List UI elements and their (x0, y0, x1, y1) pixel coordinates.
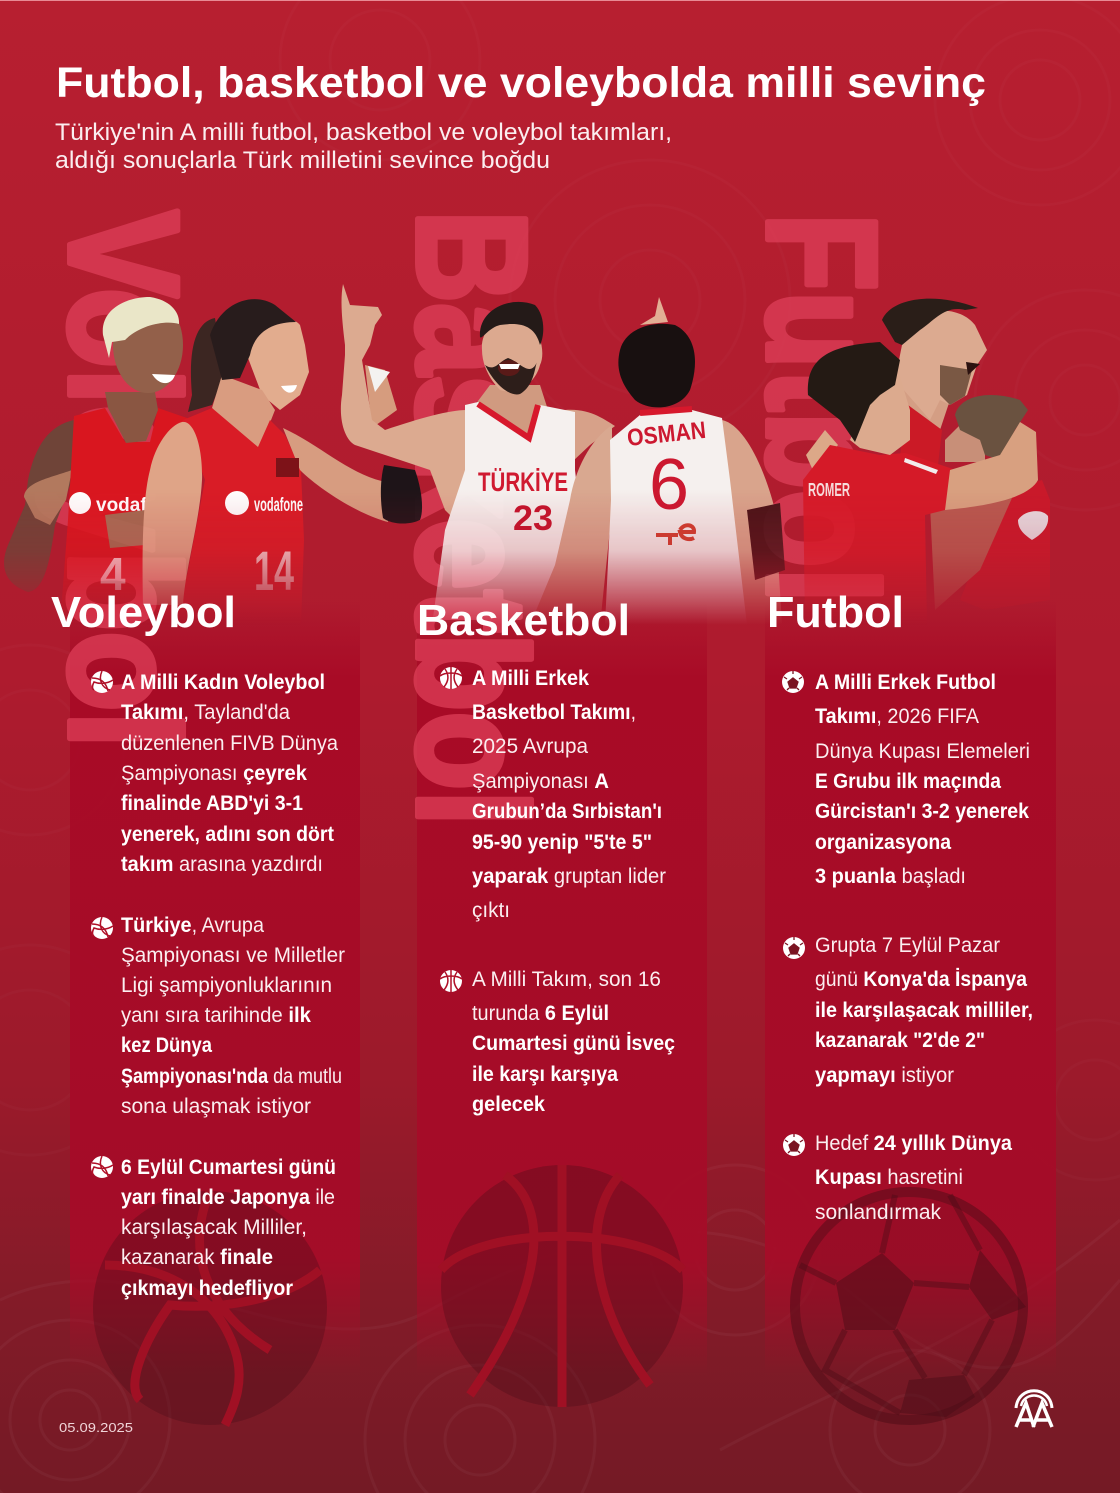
text block: futbol bullet 3 (815, 1132, 1012, 1224)
player 23 neck (477, 385, 547, 434)
text block: voleybol bullet 1: düzenlenen FIVB Dünya (121, 732, 338, 755)
text block: voleybol bullet 3: kazanarak finale (121, 1246, 273, 1269)
text block: voleybol bullet 1: takım arasına yazdırdı (121, 853, 323, 876)
text block: basketbol bullet 2: gelecek (472, 1093, 545, 1116)
text block: basketbol bullet 2: turunda 6 Eylül (472, 1002, 609, 1025)
heading: Voleybol: Voleybol (51, 588, 236, 637)
player two number: 14 (254, 539, 294, 602)
player two ponytail (188, 318, 224, 412)
text block: futbol bullet 2 (815, 934, 1033, 1087)
back player hair (882, 299, 978, 345)
text block: basketbol bullet 1: 2025 Avrupa (472, 735, 588, 758)
icon: volleyball bullet 1 (91, 671, 113, 693)
player 6 number: 6 (649, 445, 689, 525)
player two hair (210, 299, 296, 380)
subtitle (55, 119, 672, 174)
player one sponsor: vodaf (96, 495, 147, 516)
watermark: Futbol vertical word: Futbol (734, 213, 908, 603)
subtitle: aldığı sonuçlarla Türk milletini sevince boğdu (55, 147, 550, 174)
photo: football players (803, 299, 1050, 625)
player 6 sponsor logo (656, 525, 694, 545)
text block: basketbol bullet 2: Cumartesi günü İsveç (472, 1032, 675, 1055)
back player jersey (900, 405, 942, 465)
text block: futbol bullet 3: Kupası hasretini (815, 1166, 963, 1189)
player 23 right shoulder (565, 410, 615, 462)
text block: futbol bullet 1: A Milli Erkek Futbol (815, 671, 996, 694)
text block: basketbol bullet 1: Şampiyonası A (472, 770, 609, 793)
text block: voleybol bullet 2: Şampiyonası ve Milletler (121, 944, 345, 967)
text block: voleybol bullet 2 (121, 914, 345, 1118)
subtitle: Türkiye'nin A milli futbol, basketbol ve voleybol takımları, (55, 119, 672, 146)
text block: futbol bullet 1: Takımı, 2026 FIFA (815, 705, 979, 728)
player two logo (225, 491, 249, 515)
player one hand (24, 470, 72, 525)
title: Futbol, basketbol ve voleybolda milli sevinç (56, 59, 986, 107)
icon: soccer bullet 2 (783, 937, 805, 959)
heading: Futbol: Futbol (767, 588, 904, 637)
heading: Basketbol: Basketbol (417, 596, 630, 645)
text block: voleybol bullet 1 (121, 671, 338, 876)
text block: voleybol bullet 3: karşılaşacak Milliler, (121, 1216, 307, 1239)
third player face (945, 425, 985, 462)
player 23 mouth (498, 360, 520, 376)
text block: voleybol bullet 2: sona ulaşmak istiyor (121, 1095, 311, 1118)
player 6 finger (640, 297, 668, 325)
icon: basketball silhouette (441, 1165, 683, 1407)
front player jersey name: ROMER (808, 480, 850, 500)
text block: futbol bullet 1: 3 puanla başladı (815, 865, 966, 888)
player two jersey (187, 408, 304, 607)
front player neck and face (850, 370, 910, 455)
date: 05.09.2025 (59, 1420, 133, 1435)
player 23 teeth (499, 364, 520, 369)
text block: basketbol bullet 1: Grubun’da Sırbistan'ı (472, 800, 662, 823)
back player face (895, 311, 987, 420)
front player hair (808, 342, 900, 442)
text block: futbol bullet 1: E Grubu ilk maçında (815, 770, 1001, 793)
front player arm (945, 422, 1038, 510)
patch (1018, 511, 1048, 540)
text block: voleybol bullet 3: yarı finalde Japonya ile (121, 1186, 335, 1209)
player two neck (212, 375, 275, 448)
text block: voleybol bullet 3 (121, 1156, 336, 1300)
icon: soccer bullet 3 (783, 1134, 805, 1156)
text block: basketbol bullet 1: yaparak gruptan lider (472, 865, 666, 888)
player 23 hair (480, 302, 543, 345)
text block: futbol bullet 3: sonlandırmak (815, 1201, 941, 1224)
player 23 number: 23 (513, 499, 553, 538)
player 6 left arm (530, 425, 612, 625)
player two right arm (283, 428, 388, 522)
text block: basketbol bullet 2 (472, 968, 675, 1116)
right player body (960, 480, 1050, 610)
third player hair (955, 395, 1028, 460)
text block: futbol bullet 1: Gürcistan'ı 3-2 yenerek (815, 800, 1029, 823)
player one logo (69, 492, 91, 514)
text block: futbol bullet 2: Grupta 7 Eylül Pazar (815, 934, 1000, 957)
back player neck (895, 370, 950, 430)
text block: voleybol bullet 1: Şampiyonası çeyrek (121, 762, 307, 785)
icon: volleyball bullet 2 (91, 917, 113, 939)
text block: futbol bullet 2: günü Konya'da İspanya (815, 968, 1027, 991)
text block: voleybol bullet 2: Türkiye, Avrupa (121, 914, 264, 937)
player two face (245, 319, 309, 410)
text block: voleybol bullet 1: finalinde ABD'yi 3-1 (121, 792, 303, 815)
player 6 armband (747, 503, 785, 580)
player 23 tape (368, 366, 390, 392)
panel: futbol column (765, 600, 1056, 1375)
icon: soccer ball silhouette (790, 1187, 1028, 1425)
text block: voleybol bullet 3: çıkmayı hedefliyor (121, 1277, 293, 1300)
text block: voleybol bullet 2: Ligi şampiyonluklarının (121, 974, 332, 997)
panel: voleybol column (70, 600, 360, 1375)
text block: basketbol bullet 1: Basketbol Takımı, (472, 701, 636, 724)
back player arm (806, 430, 838, 475)
player 23 beard (485, 358, 537, 394)
player 23 jersey name: TÜRKİYE (478, 467, 568, 497)
player one number: 4 (100, 548, 126, 600)
text block: futbol bullet 2: yapmayı istiyor (815, 1064, 954, 1087)
player one neck (105, 392, 158, 443)
text block: futbol bullet 1 (815, 671, 1030, 888)
player one jersey (60, 408, 187, 625)
text block: voleybol bullet 1: A Milli Kadın Voleybol (121, 671, 325, 694)
player two flag patch (276, 458, 299, 477)
player two smile (281, 385, 297, 393)
watermark: Basketbol vertical word: Basketbol (384, 210, 558, 826)
icon: volleyball silhouette (93, 1191, 327, 1425)
text block: voleybol bullet 1: Takımı, Tayland'da (121, 701, 290, 724)
player two left arm (143, 422, 202, 605)
player one face (113, 297, 183, 393)
player 6 jersey name: OSMAN (626, 417, 707, 452)
text block: futbol bullet 1: organizasyona (815, 831, 951, 854)
player one second hand (105, 510, 145, 548)
player 6 right arm (722, 420, 782, 625)
player one arm (4, 420, 74, 592)
text block: futbol bullet 1: Dünya Kupası Elemeleri (815, 740, 1030, 763)
back player beard (940, 365, 972, 405)
text block: voleybol bullet 1: yenerek, adını son dört (121, 823, 334, 846)
icon: basketball bullet 2 (440, 970, 462, 992)
back player mouth (966, 362, 980, 375)
player two sponsor: vodafone (254, 495, 303, 516)
sleeve badge (904, 458, 938, 474)
text block: basketbol bullet 2: A Milli Takım, son 16 (472, 968, 661, 991)
icon: soccer bullet 1 (782, 671, 804, 693)
player 23 face (482, 317, 542, 391)
chest (930, 498, 1012, 610)
player 23 raised arm (340, 284, 465, 515)
photo: basketball players (341, 284, 785, 625)
player one hair (103, 297, 179, 358)
text block: voleybol bullet 2: kez Dünya (121, 1034, 212, 1057)
player one smile (152, 374, 175, 383)
photo: volleyball players (4, 297, 422, 625)
text block: futbol bullet 2: kazanarak "2'de 2" (815, 1029, 985, 1052)
panel: basketbol column (417, 600, 707, 1375)
front player jersey (803, 445, 956, 625)
player 6 hair (618, 324, 695, 407)
logo: AA (1016, 1391, 1052, 1427)
text block: futbol bullet 3: Hedef 24 yıllık Dünya (815, 1132, 1012, 1155)
text block: voleybol bullet 2: Şampiyonası'nda da mutlu (121, 1065, 342, 1088)
player 6 collar (640, 409, 692, 413)
icon: basketball bullet 1 (440, 667, 462, 689)
icon: volleyball bullet 3 (91, 1156, 113, 1178)
text block: voleybol bullet 2: yanı sıra tarihinde ilk (121, 1004, 311, 1027)
player two armband (381, 465, 422, 524)
text block: basketbol bullet 1: çıktı (472, 899, 510, 922)
text block: basketbol bullet 2: ile karşı karşıya (472, 1063, 618, 1086)
text block: futbol bullet 2: ile karşılaşacak milliler, (815, 999, 1033, 1022)
text block: basketbol bullet 1 (472, 667, 666, 922)
player 6 jersey (605, 410, 747, 625)
player 23 jersey (433, 402, 576, 621)
player 23 collar (478, 404, 538, 438)
text block: voleybol bullet 3: 6 Eylül Cumartesi günü (121, 1156, 336, 1179)
text block: basketbol bullet 1: A Milli Erkek (472, 667, 589, 690)
watermark: Voleybol vertical word: Voleybol (36, 210, 210, 748)
text block: basketbol bullet 1: 95-90 yenip "5'te 5" (472, 831, 652, 854)
player 23 second hand (365, 365, 397, 428)
